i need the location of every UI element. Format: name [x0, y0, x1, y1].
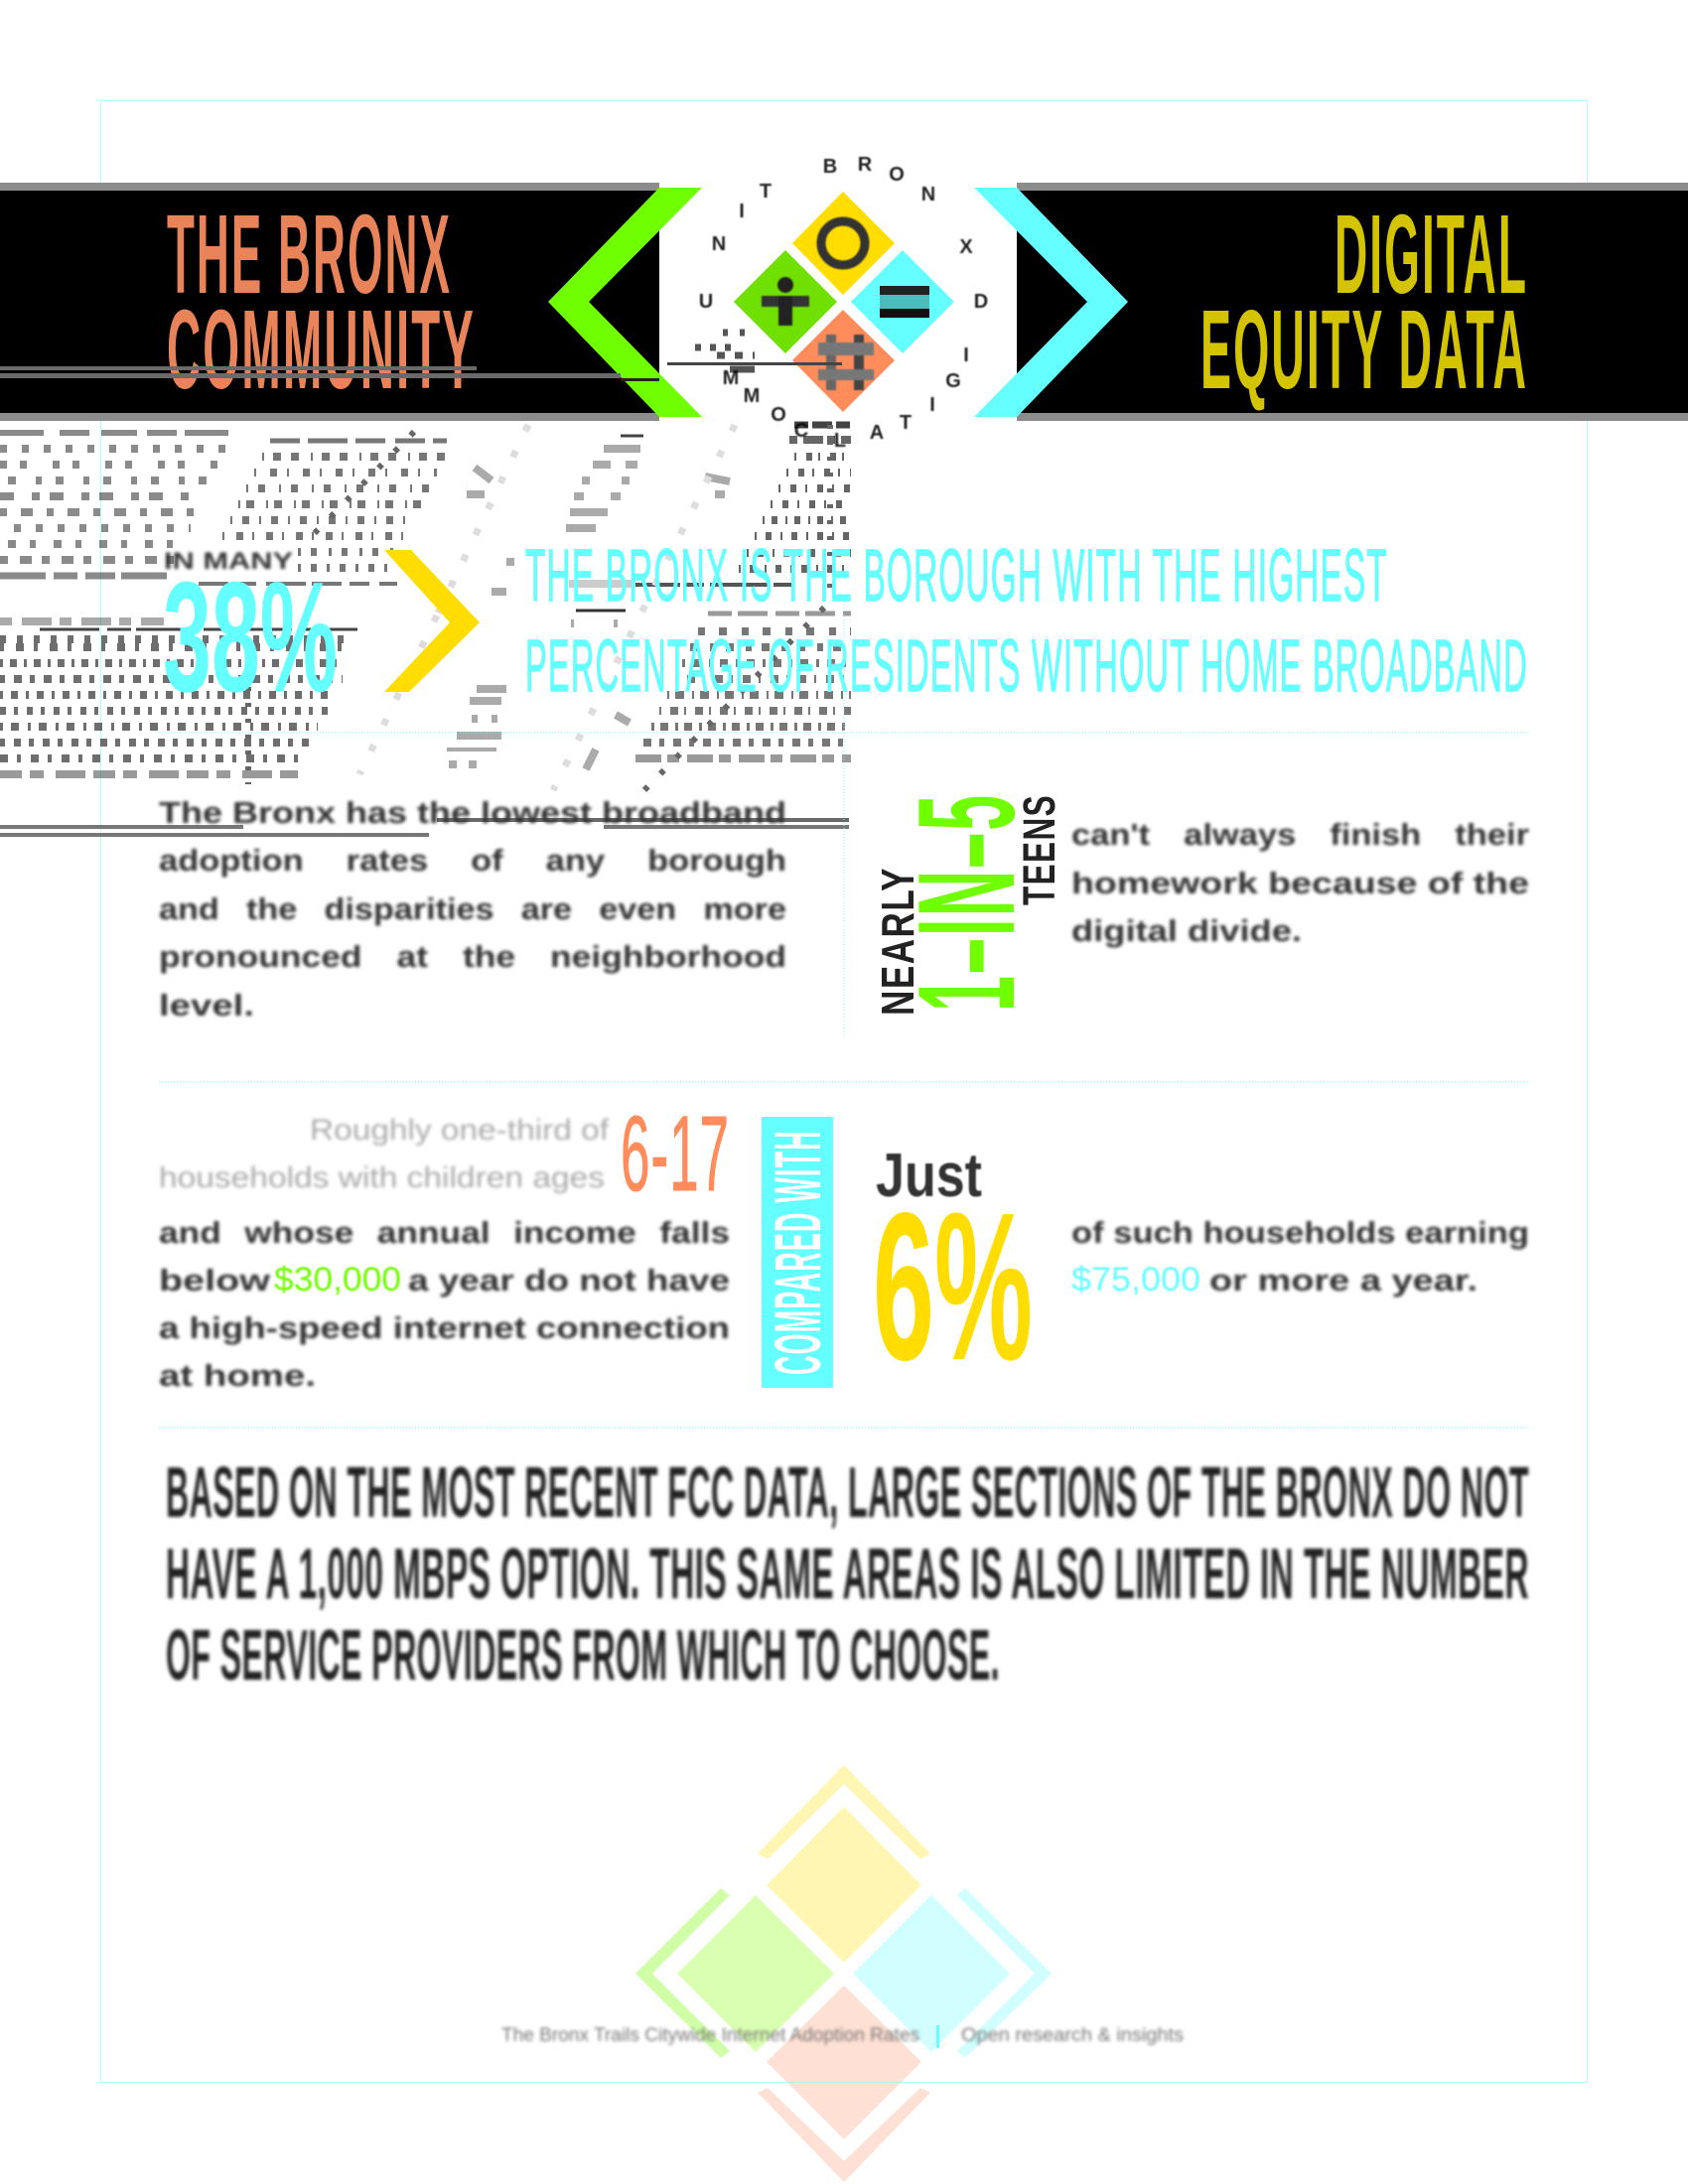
block D — [635, 614, 851, 758]
light diagonal chunks — [359, 425, 735, 790]
sliced ring fragments — [447, 436, 730, 769]
paragraph: high income — [1071, 1215, 1529, 1297]
paragraph: lowest adoption: and the disparities are even more — [159, 891, 786, 926]
paragraph: light lead-in — [159, 1114, 610, 1194]
paragraph: light lead-in: households with children ages — [159, 1161, 605, 1194]
text: 6-17 — [621, 1093, 730, 1213]
paragraph: low income: a high-speed internet connection — [159, 1310, 730, 1345]
paragraph: low income — [159, 1215, 730, 1393]
stat: 6 percent: 6% — [873, 1168, 1033, 1404]
bottom logo watermark — [635, 1765, 1052, 2182]
header band — [0, 183, 1688, 421]
label: in many: IN MANY — [164, 548, 293, 575]
paragraph: low income: at home. — [159, 1358, 316, 1393]
closing statement — [166, 1453, 1529, 1696]
stat: nearly 1-in-5 teens: NEARLY — [872, 867, 923, 1016]
footer credit: Open research & insights — [961, 2025, 1184, 2046]
amount: $30,000: $30,000 — [274, 1261, 401, 1298]
paragraph: lowest adoption — [159, 795, 786, 1023]
footer credit — [501, 2025, 1184, 2046]
paragraph: homework: homework because of the — [1071, 866, 1529, 900]
icon: cyan diamond bars — [851, 250, 954, 353]
block E — [621, 425, 851, 585]
page guide frame — [101, 101, 1587, 2083]
icon: green diamond person — [734, 250, 837, 353]
paragraph: lowest adoption: level. — [159, 988, 254, 1023]
amount: $75,000: $75,000 — [1071, 1261, 1200, 1298]
paragraph: high income: of such households earning — [1071, 1215, 1529, 1250]
green chevron — [548, 188, 702, 417]
block B — [199, 441, 447, 584]
glitched sheared text artifact — [0, 333, 851, 799]
headline cyan — [525, 534, 1528, 707]
stat: nearly 1-in-5 teens: TEENS — [1014, 794, 1064, 905]
header title left — [167, 192, 476, 412]
header title right — [1200, 192, 1528, 412]
footer credit: The Bronx Trails Citywide Internet Adoption Rates — [501, 2025, 919, 2046]
label: just: Just — [876, 1142, 982, 1210]
dividers — [159, 596, 1529, 1428]
yellow arrow chevron — [384, 550, 480, 692]
icon: yellow diamond — [792, 192, 895, 295]
paragraph: lowest adoption: adoption rates of any borough — [159, 843, 786, 878]
38 percent stat: 38% — [163, 550, 338, 725]
text: COMMUNITY — [167, 287, 476, 412]
paragraph: homework: digital divide. — [1071, 913, 1302, 948]
block C — [0, 621, 357, 774]
paragraph: low income: below — [159, 1263, 271, 1297]
icon: orange diamond hash — [792, 310, 895, 412]
fragments below band seam near emblem — [695, 333, 755, 369]
stat: nearly 1-in-5 teens — [872, 793, 1064, 1016]
paragraph: low income: and whose annual income falls — [159, 1215, 730, 1250]
triangle markers — [248, 425, 830, 799]
paragraph: lowest adoption: The Bronx has the lowest broadband — [159, 795, 786, 830]
text: 1–IN–5 — [890, 793, 1044, 1012]
paragraph: homework: can't always finish their — [1071, 817, 1529, 852]
emblem ring lettering: BRONXDIGITALCOMMUNIT — [699, 154, 988, 452]
text: THE BRONX — [167, 192, 452, 317]
paragraph: low income: a year do not have — [408, 1263, 730, 1297]
paragraph: light lead-in: Roughly one-third of — [310, 1114, 610, 1147]
text: COMPARED WITH — [761, 1130, 834, 1375]
compared-with banner — [761, 1117, 834, 1388]
horizontal glitch lines — [0, 362, 849, 837]
paragraph: lowest adoption: pronounced at the neighborhood — [159, 939, 786, 974]
cyan chevron — [974, 188, 1128, 417]
footer separator — [936, 2025, 939, 2048]
paragraph: homework — [1071, 817, 1529, 948]
emblem: four diamonds with icons — [734, 192, 954, 412]
fragment on black band — [534, 369, 588, 400]
paragraph: high income: or more a year. — [1209, 1263, 1477, 1297]
block A — [0, 433, 243, 576]
